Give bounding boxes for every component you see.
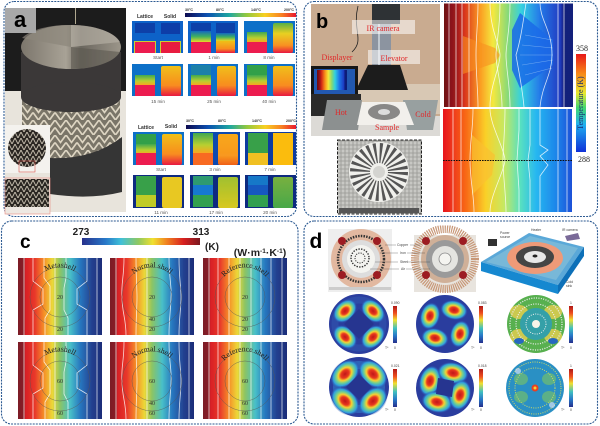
legend: temperature scale: -1 bbox=[277, 248, 283, 255]
material callouts: Copper bbox=[397, 243, 409, 247]
legends: disc colorbars: T* bbox=[561, 408, 565, 412]
legend: temperature colorbar: 288 bbox=[578, 155, 590, 164]
photo: sample disc one bbox=[328, 229, 392, 292]
legend: temperature scale: 273 bbox=[73, 227, 90, 238]
chart: thermal sequence top: 40 min bbox=[262, 99, 276, 104]
box annotations: Power bbox=[500, 231, 510, 235]
photo: sample disc two bbox=[414, 229, 476, 292]
legends: disc colorbars: T* bbox=[471, 408, 475, 412]
chart: thermal sequence top: 200°C bbox=[284, 8, 294, 12]
chart: mode disc row 2 col 2 bbox=[415, 359, 475, 417]
chart: normal shell 20: 40 bbox=[149, 317, 155, 323]
material callouts: Iron bbox=[400, 251, 406, 255]
legends: disc colorbars: T* bbox=[385, 408, 389, 412]
chart: field disc row 1 col 3 bbox=[507, 295, 565, 353]
chart: thermal sequence top: 15 min bbox=[151, 99, 165, 104]
chart: metashell 60: 60 bbox=[57, 379, 63, 385]
chart: thermal sequence bottom: 7 min bbox=[264, 167, 276, 172]
chart: reference shell 20: 20 bbox=[242, 327, 248, 333]
chart: thermal sequence bottom: 3 min bbox=[209, 167, 221, 172]
panel: b bbox=[304, 2, 598, 216]
photo: lattice cylinder bbox=[5, 8, 126, 212]
chart: mode disc row 1 col 1 bbox=[328, 294, 390, 354]
legends: disc colorbars: T* bbox=[385, 346, 389, 350]
chart: temperature map top bbox=[444, 3, 573, 107]
legends: disc colorbars: 0.021 bbox=[391, 364, 400, 368]
panel: c bbox=[0, 220, 299, 424]
chart: thermal sequence bottom: Solid bbox=[165, 124, 177, 130]
legends: disc colorbars: T* bbox=[471, 346, 475, 350]
label: a bbox=[5, 7, 36, 33]
setup annotations: IR camera bbox=[366, 24, 400, 33]
label: a: a bbox=[14, 7, 27, 32]
legends: disc colorbars: 0 bbox=[480, 408, 482, 412]
chart: thermal sequence top: 140°C bbox=[251, 8, 261, 12]
setup annotations: Hot bbox=[335, 108, 348, 117]
legend: temperature scale: 313 bbox=[193, 227, 210, 238]
chart: thermal sequence bottom: Start bbox=[156, 167, 167, 172]
setup annotations: Displayer bbox=[321, 53, 353, 62]
box annotations: IR camera bbox=[562, 228, 578, 232]
chart: thermal sequence bottom: Lattice bbox=[138, 125, 154, 131]
chart: metashell 60: Metashell bbox=[44, 346, 76, 356]
legend: temperature scale: (W·m bbox=[234, 247, 260, 259]
legends: disc colorbars: 0 bbox=[570, 346, 572, 350]
label: b: b bbox=[316, 11, 328, 33]
material callouts: Air bbox=[401, 267, 406, 271]
legend: temperature scale: -1 bbox=[260, 248, 266, 255]
chart: normal shell 60: 60 bbox=[149, 379, 155, 385]
chart: thermal sequence top: 1 min bbox=[208, 55, 220, 60]
chart: thermal sequence top: Lattice bbox=[137, 14, 153, 20]
box annotations: sink bbox=[566, 284, 572, 288]
legends: disc colorbars: T* bbox=[561, 346, 565, 350]
chart: metashell 20: Metashell bbox=[44, 262, 76, 272]
chart: thermal sequence bottom: 140°C bbox=[252, 119, 262, 123]
label: d: d bbox=[310, 230, 322, 253]
chart: field disc row 2 col 3 bbox=[506, 359, 564, 417]
box annotations: source bbox=[500, 235, 510, 239]
setup annotations bbox=[321, 20, 431, 132]
chart: metashell 20 bbox=[18, 258, 102, 335]
box annotations: Cold bbox=[566, 280, 573, 284]
chart: mode disc row 2 col 1 bbox=[324, 353, 394, 422]
chart: normal shell 60: 60 bbox=[149, 411, 155, 417]
chart: thermal sequence top: 80°C bbox=[216, 8, 224, 12]
chart: normal shell 60: Normal shell bbox=[131, 346, 173, 358]
legends: disc colorbars: 0.018 bbox=[478, 364, 487, 368]
chart: reference shell 20: 20 bbox=[242, 317, 248, 323]
chart: thermal sequence top: 8 min bbox=[263, 55, 275, 60]
inset: lattice close-up bbox=[5, 178, 50, 214]
label: c: c bbox=[20, 232, 31, 253]
legends: disc colorbars: 1 bbox=[570, 364, 572, 368]
chart: metashell 20: 20 bbox=[57, 327, 63, 333]
legends: disc colorbars: 0.090 bbox=[391, 301, 400, 305]
chart: reference shell 60: Reference shell bbox=[220, 348, 270, 361]
chart: thermal sequence bottom: 80°C bbox=[218, 119, 226, 123]
chart: normal shell 20 bbox=[110, 258, 194, 335]
panel: a bbox=[4, 2, 296, 216]
chart: normal shell 20: Normal shell bbox=[131, 262, 173, 274]
legends: disc colorbars bbox=[385, 301, 573, 412]
chart: thermal sequence top: 25 min bbox=[207, 99, 221, 104]
material callouts: Steel bbox=[400, 260, 408, 264]
chart: thermal sequence top: Solid bbox=[164, 14, 176, 20]
chart: reference shell 60: 60 bbox=[242, 379, 248, 385]
chart: reference shell 20: 20 bbox=[242, 295, 248, 301]
legend: temperature colorbar: Temperature (K) bbox=[576, 76, 585, 130]
chart: reference shell 60 bbox=[203, 342, 287, 419]
chart: thermal sequence bottom: 20 min bbox=[263, 210, 277, 215]
chart: metashell 60 bbox=[18, 342, 102, 419]
box annotations: Heater bbox=[531, 228, 542, 232]
legend: temperature scale: (K) bbox=[205, 242, 219, 253]
chart: reference shell 60: 60 bbox=[242, 401, 248, 407]
legends: disc colorbars: 0 bbox=[394, 408, 396, 412]
chart: metashell 20: 20 bbox=[57, 295, 63, 301]
inset: lattice sphere bbox=[5, 125, 50, 173]
chart: thermal sequence top bbox=[132, 8, 296, 104]
chart: thermal sequence bottom: 30°C bbox=[186, 119, 194, 123]
legends: disc colorbars: 0 bbox=[394, 346, 396, 350]
chart: normal shell 20: 20 bbox=[149, 295, 155, 301]
legends: disc colorbars: 1 bbox=[570, 301, 572, 305]
chart: thermal sequence top: 30°C bbox=[185, 8, 193, 12]
chart: mode disc row 1 col 2 bbox=[416, 295, 474, 353]
setup annotations: Sample bbox=[375, 123, 399, 132]
chart: reference shell 60: 60 bbox=[242, 411, 248, 417]
legend: temperature colorbar bbox=[576, 44, 590, 164]
chart: thermal sequence bottom: 11 min bbox=[154, 210, 168, 215]
chart: normal shell 60: 40 bbox=[149, 401, 155, 407]
legends: disc colorbars: 0.083 bbox=[478, 301, 487, 305]
legends: disc colorbars: 0 bbox=[570, 408, 572, 412]
chart: thermal sequence top: Start bbox=[153, 55, 164, 60]
setup annotations: Elevator bbox=[380, 54, 408, 63]
chart: temperature map bottom bbox=[443, 109, 572, 212]
chart: reference shell 20: Reference shell bbox=[220, 264, 270, 277]
diagram: 3D test box bbox=[481, 233, 584, 294]
legend: temperature colorbar: 358 bbox=[576, 44, 588, 53]
chart: normal shell 60 bbox=[110, 342, 194, 419]
box annotations bbox=[500, 228, 578, 288]
panel: d bbox=[304, 221, 598, 424]
legends: disc colorbars: 0 bbox=[480, 346, 482, 350]
legend: temperature scale bbox=[73, 227, 286, 259]
setup annotations: Cold bbox=[415, 110, 431, 119]
legend: temperature scale: ·K bbox=[266, 247, 277, 259]
chart: reference shell 20 bbox=[203, 258, 287, 335]
chart: thermal sequence bottom: 17 min bbox=[209, 210, 223, 215]
photo: experimental setup bbox=[311, 4, 440, 136]
chart: metashell 60: 60 bbox=[57, 411, 63, 417]
legend: temperature scale: ) bbox=[283, 247, 286, 259]
chart: thermal sequence bottom: 200°C bbox=[286, 119, 296, 123]
inset: sample close-up bbox=[338, 140, 422, 214]
chart: thermal sequence bottom bbox=[133, 119, 296, 215]
chart: normal shell 20: 20 bbox=[149, 327, 155, 333]
material callouts bbox=[370, 243, 430, 271]
